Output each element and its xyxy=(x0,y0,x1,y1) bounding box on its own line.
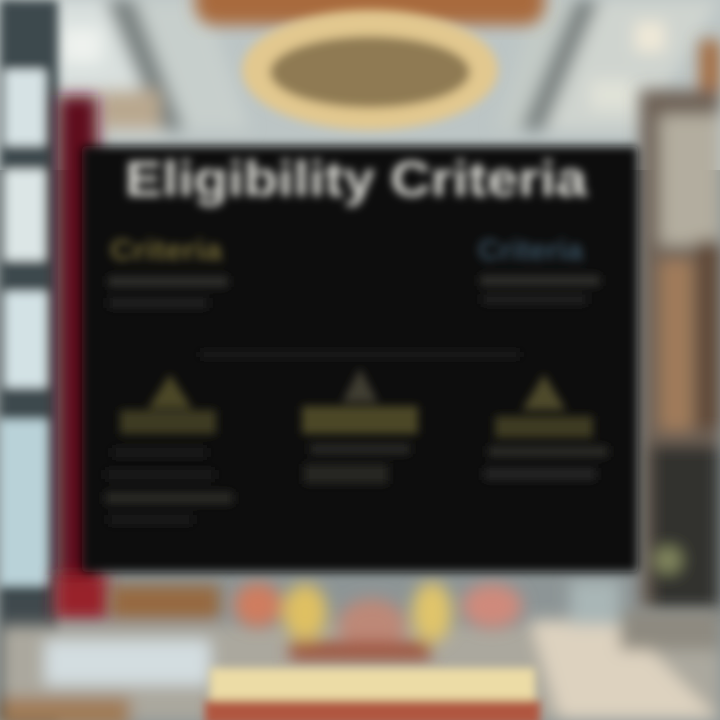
right heading and text xyxy=(478,234,600,304)
divider text xyxy=(200,351,520,358)
column 1: icon and text xyxy=(105,374,233,524)
right pillars xyxy=(640,40,720,610)
left heading and text: Criteria xyxy=(110,234,222,267)
column 2: icon and text xyxy=(302,368,418,484)
main black panel xyxy=(82,146,638,572)
title: Eligibility Criteria xyxy=(125,151,588,207)
red curtain xyxy=(54,95,109,620)
flower arrangement xyxy=(234,582,522,660)
left windows xyxy=(0,0,58,720)
left heading and text xyxy=(108,234,228,308)
right heading and text: Criteria xyxy=(478,234,583,267)
banquet table xyxy=(205,668,540,720)
chandelier xyxy=(195,0,545,130)
column 3: icon and text xyxy=(484,374,608,480)
bottom: floor and flowers xyxy=(0,580,720,720)
